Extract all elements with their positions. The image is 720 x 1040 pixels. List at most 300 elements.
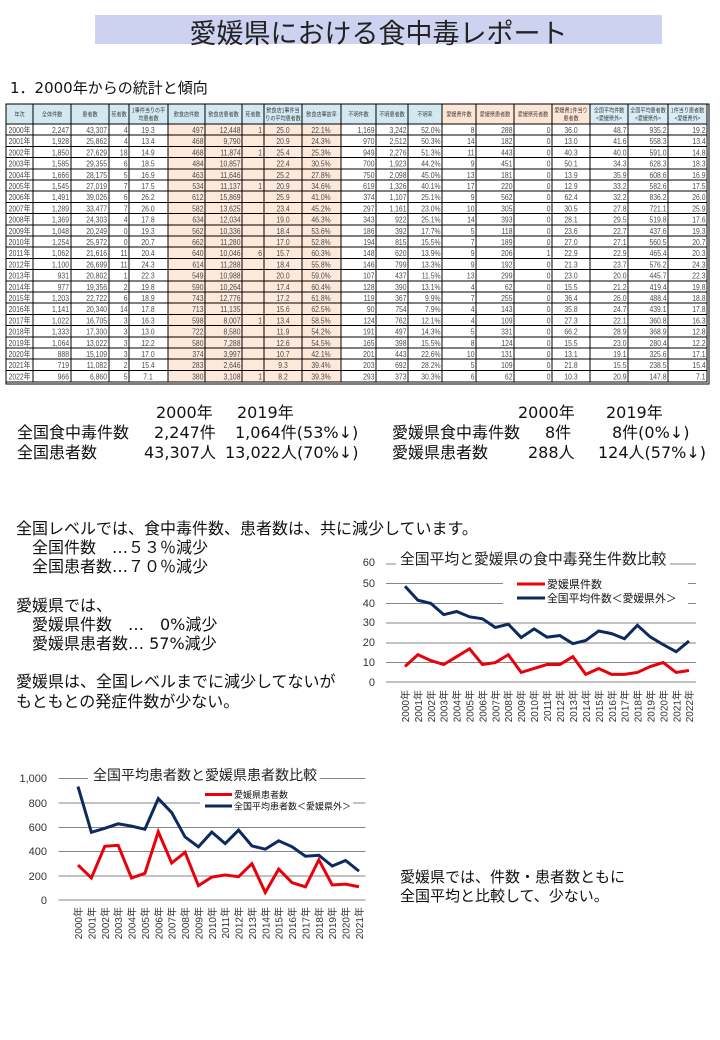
- table data rows: 20.0: [276, 271, 290, 281]
- table header row: [14, 105, 704, 123]
- y axis labels chart 2: 1,000: [19, 773, 47, 785]
- table data rows: 590: [192, 282, 204, 292]
- legend chart 1: [503, 576, 688, 607]
- table data rows: 17.1: [692, 349, 705, 359]
- table data rows: 15.5: [613, 360, 627, 370]
- table data rows: 14: [120, 304, 128, 314]
- x axis labels chart 2: 2015年: [273, 907, 286, 939]
- table data rows: 0: [547, 136, 551, 146]
- table data rows: 46.3%: [311, 215, 331, 225]
- table header row: 不明率: [417, 109, 433, 119]
- table data rows: 27,629: [86, 148, 107, 158]
- table data rows: 11,280: [220, 237, 240, 247]
- table data rows: 17.8: [141, 304, 155, 314]
- table data rows: 6: [124, 159, 128, 169]
- table data rows: 255: [501, 293, 513, 303]
- table data rows: 1,326: [389, 181, 407, 191]
- table data rows: 299: [501, 271, 513, 281]
- table data rows: 374: [363, 192, 375, 202]
- table data rows: 6: [471, 372, 475, 382]
- table header row: 飲食店件数: [174, 109, 200, 119]
- table data rows: 10: [467, 349, 474, 359]
- x axis labels chart 1: 2004年: [451, 690, 464, 722]
- table data rows: 25.9: [276, 192, 290, 202]
- analysis text block: 全国件数 …５３％減少: [32, 538, 208, 557]
- table data rows: 30.5: [564, 204, 578, 214]
- table data rows: 10,264: [220, 282, 241, 292]
- table data rows: 3: [124, 316, 128, 326]
- table data rows: 1,850: [52, 148, 69, 158]
- table data rows: 392: [395, 226, 406, 236]
- table data rows: 3: [124, 349, 128, 359]
- table data rows: 36.0: [564, 125, 578, 135]
- table data rows: 3: [124, 338, 128, 348]
- table data rows: 26.0: [141, 204, 155, 214]
- table data rows: 18.9: [141, 293, 155, 303]
- y axis labels chart 2: 0: [41, 895, 47, 907]
- conclusion text: 全国平均と比較して、少ない。: [400, 887, 609, 905]
- table data rows: 24.3%: [311, 136, 331, 146]
- table data rows: 238.5: [649, 360, 666, 370]
- table data rows: [9, 124, 706, 382]
- table header row: 死者数: [111, 109, 127, 119]
- national statistics summary: 1,064件(53%↓): [235, 423, 358, 442]
- table data rows: 18.8: [692, 293, 705, 303]
- table data rows: 23.4: [276, 204, 290, 214]
- table data rows: 390: [395, 282, 406, 292]
- table data rows: 62.5%: [311, 304, 331, 314]
- table data rows: 576.2: [649, 260, 666, 270]
- table data rows: 0: [547, 237, 551, 247]
- table data rows: 14.9: [141, 148, 155, 158]
- x axis labels chart 1: 2010年: [528, 690, 541, 722]
- table data rows: 591.0: [649, 148, 666, 158]
- x axis labels chart 1: 2007年: [489, 690, 502, 722]
- table data rows: 25,972: [86, 237, 107, 247]
- table data rows: 4: [471, 304, 475, 314]
- table data rows: 42.1%: [311, 349, 331, 359]
- table data rows: 662: [192, 237, 204, 247]
- table data rows: 1,666: [52, 170, 69, 180]
- table data rows: 19.3: [692, 226, 705, 236]
- table data rows: 147.8: [649, 372, 666, 382]
- table data rows: 25.9: [692, 204, 705, 214]
- table data rows: 620: [395, 248, 406, 258]
- Ehime statistics summary: 愛媛県食中毒件数: [392, 423, 520, 442]
- table data rows: 0: [547, 215, 551, 225]
- table data rows: 280.4: [650, 338, 667, 348]
- table data rows: 1,333: [52, 327, 69, 337]
- table data rows: 124: [501, 338, 513, 348]
- table data rows: 0: [547, 293, 551, 303]
- x axis labels chart 2: 2007年: [166, 907, 179, 939]
- national statistics summary: 2,247件: [154, 423, 216, 442]
- conclusion text: 愛媛県では、件数・患者数ともに: [400, 868, 625, 886]
- table data rows: 0: [547, 226, 551, 236]
- table data rows: 608.6: [649, 170, 666, 180]
- table data rows: 17.8: [141, 215, 155, 225]
- table data rows: 59.0%: [311, 271, 331, 281]
- table data rows: 2008年: [9, 214, 31, 225]
- gridlines chart 2: [59, 779, 366, 900]
- x axis labels chart 1: 2018年: [632, 690, 645, 722]
- table data rows: 17,300: [86, 327, 107, 337]
- table data rows: 62: [505, 282, 512, 292]
- table data rows: 10.3: [564, 372, 578, 382]
- table data rows: 51.3%: [421, 148, 441, 158]
- y axis labels chart 1: 50: [363, 578, 375, 590]
- table data rows: 935.2: [649, 125, 666, 135]
- table data rows: 7.1: [696, 372, 705, 382]
- table data rows: 1,064: [52, 338, 70, 348]
- table data rows: 17.4: [276, 282, 290, 292]
- x axis labels chart 1: 2005年: [464, 690, 476, 722]
- table data rows: 836.2: [649, 192, 666, 202]
- table data rows: 14: [467, 136, 475, 146]
- table data rows: 5: [124, 372, 128, 382]
- table data rows: 10.7: [276, 349, 290, 359]
- table data rows: 1,585: [52, 159, 69, 169]
- table data rows: 17.2: [276, 293, 290, 303]
- table data rows: 380: [192, 372, 204, 382]
- table data rows: 6: [124, 192, 128, 202]
- x axis labels chart 1: 2021年: [670, 690, 683, 722]
- table data rows: 0: [547, 192, 551, 202]
- table data rows: 0: [547, 316, 551, 326]
- legend chart 2: 全国平均患者数＜愛媛県外＞: [234, 800, 351, 812]
- table data rows: 165: [363, 338, 375, 348]
- table data rows: 6,860: [90, 372, 107, 382]
- table data rows: 17.6: [692, 215, 705, 225]
- table data rows: 10: [467, 204, 474, 214]
- table data rows: 11.9: [277, 327, 289, 337]
- table data rows: 34.3: [613, 159, 627, 169]
- table header row: 不明患者数: [379, 109, 405, 119]
- table header row: 飲食店1事件当: [266, 105, 300, 115]
- table data rows: 949: [363, 148, 375, 158]
- table data rows: 393: [501, 215, 513, 225]
- table data rows: 762: [395, 316, 406, 326]
- y axis labels chart 1: [363, 557, 375, 689]
- legend chart 1: 全国平均件数＜愛媛県外＞: [547, 590, 677, 606]
- table data rows: 20.0: [613, 271, 627, 281]
- x axis labels chart 2: 2020年: [340, 907, 353, 939]
- table data rows: 888: [58, 349, 69, 359]
- table data rows: 17.5: [141, 181, 155, 191]
- table data rows: 640: [192, 248, 204, 258]
- table data rows: 13,022: [86, 338, 107, 348]
- table data rows: 8: [471, 338, 475, 348]
- table data rows: 970: [363, 136, 375, 146]
- table data rows: 2006年: [9, 191, 31, 202]
- table data rows: 614: [192, 260, 204, 270]
- x axis labels chart 2: 2017年: [300, 907, 312, 939]
- legend chart 2: [200, 786, 353, 812]
- table data rows: 11: [120, 260, 128, 270]
- table data rows: 33.2: [613, 181, 627, 191]
- table data rows: 12.2: [141, 338, 155, 348]
- table data rows: 1,100: [52, 260, 69, 270]
- table header row: 飲食店事故率: [306, 109, 337, 119]
- table data rows: 20,249: [86, 226, 107, 236]
- x axis labels chart 1: 2009年: [515, 690, 528, 722]
- table data rows: 0: [547, 360, 551, 370]
- table data rows: 2001年: [9, 135, 31, 146]
- table data rows: 5: [471, 360, 475, 370]
- y axis labels chart 1: 0: [369, 677, 375, 689]
- table data rows: 23.0: [613, 338, 627, 348]
- table data rows: 9: [471, 192, 475, 202]
- table data rows: 582: [192, 204, 204, 214]
- table data rows: 7.1: [143, 372, 153, 382]
- analysis text block: 全国患者数…７０％減少: [32, 557, 208, 576]
- table data rows: 34.6%: [311, 181, 331, 191]
- table data rows: 2003年: [9, 158, 31, 169]
- table data rows: 194: [363, 237, 375, 247]
- x axis labels chart 2: 2003年: [112, 907, 125, 939]
- table data rows: 439.1: [649, 304, 666, 314]
- table data rows: 43,307: [86, 125, 107, 135]
- table data rows: 62.4: [564, 192, 578, 202]
- table data rows: 28,175: [86, 170, 107, 180]
- table data rows: 1: [547, 248, 551, 258]
- table data rows: 549: [192, 271, 204, 281]
- table data rows: 25.1%: [421, 215, 441, 225]
- table data rows: 2: [124, 360, 128, 370]
- table data rows: 13: [467, 271, 474, 281]
- table header row: 飲食店患者数: [208, 109, 239, 119]
- table data rows: 612: [192, 192, 204, 202]
- table data rows: 28.1: [564, 215, 578, 225]
- table data rows: 0: [547, 181, 551, 191]
- table data rows: 12.8: [692, 327, 705, 337]
- table data rows: 0: [547, 125, 551, 135]
- table data rows: 26.0: [613, 293, 627, 303]
- Ehime statistics summary: 2000年: [518, 403, 575, 422]
- table data rows: 451: [501, 159, 513, 169]
- table data rows: 343: [363, 215, 375, 225]
- table data rows: 15.7: [276, 248, 290, 258]
- series: national average patients: [78, 787, 359, 871]
- table data rows: 1: [124, 271, 128, 281]
- legend chart 2: 愛媛県患者数: [234, 788, 288, 801]
- table data rows: 2,247: [52, 125, 69, 135]
- table data rows: 18: [120, 148, 128, 158]
- table data rows: 21,616: [86, 248, 107, 258]
- table data rows: 20.9: [613, 372, 627, 382]
- table data rows: 2007年: [9, 203, 31, 214]
- table data rows: 12,776: [220, 293, 240, 303]
- title: [95, 15, 662, 44]
- table data rows: 21.2: [613, 282, 627, 292]
- national statistics summary: 全国食中毒件数: [17, 423, 129, 442]
- x axis labels chart 1: 2015年: [593, 690, 606, 722]
- chart title 1: 全国平均と愛媛県の食中毒発生件数比較: [400, 548, 667, 569]
- table data rows: 13.4: [276, 316, 290, 326]
- national statistics summary: [17, 403, 358, 462]
- table data rows: 488.4: [650, 293, 667, 303]
- Ehime statistics summary: 8件(0%↓): [612, 423, 689, 442]
- table data rows: 45.2%: [311, 204, 331, 214]
- table data rows: 44.2%: [421, 159, 441, 169]
- table data rows: 305: [501, 204, 513, 214]
- table data rows: 0: [547, 159, 551, 169]
- table data rows: 2017年: [9, 315, 31, 326]
- table data rows: 1: [258, 148, 262, 158]
- x axis labels chart 2: 2021年: [353, 907, 366, 939]
- x axis labels chart 1: 2008年: [502, 690, 515, 722]
- table data rows: 1: [258, 316, 262, 326]
- table data rows: 1,545: [52, 181, 69, 191]
- table data rows: 11.5%: [422, 271, 441, 281]
- table data rows: 0: [124, 237, 128, 247]
- table data rows: 1,107: [389, 192, 407, 202]
- table data rows: 20.9: [276, 136, 290, 146]
- table data rows: 0: [547, 260, 551, 270]
- table data rows: 66.2: [564, 327, 578, 337]
- x axis labels chart 1: [399, 690, 696, 722]
- table data rows: 0: [547, 349, 551, 359]
- table data rows: 18.5: [141, 159, 155, 169]
- table data rows: 25.2: [276, 170, 290, 180]
- table data rows: 12.1%: [421, 316, 441, 326]
- table data rows: 9: [471, 159, 475, 169]
- table data rows: 186: [363, 226, 375, 236]
- table data rows: 19.3: [141, 125, 155, 135]
- table data rows: 325.6: [649, 349, 666, 359]
- table data rows: 61.8%: [311, 293, 331, 303]
- table data rows: 1,048: [52, 226, 69, 236]
- x axis labels chart 2: 2006年: [152, 907, 165, 939]
- x axis labels chart 2: 2013年: [246, 907, 259, 939]
- table header row: 均患者数: [138, 113, 159, 123]
- x axis labels chart 1: 2000年: [399, 690, 412, 722]
- table data rows: 58.5%: [311, 316, 331, 326]
- national statistics summary: 13,022人(70%↓): [225, 443, 358, 462]
- table data rows: 192: [501, 260, 513, 270]
- table data rows: 0: [547, 271, 551, 281]
- table data rows: 182: [501, 136, 513, 146]
- Ehime statistics summary: [392, 403, 706, 462]
- table data rows: 41.0%: [311, 192, 331, 202]
- table data rows: 124: [363, 316, 375, 326]
- x axis labels chart 1: 2001年: [412, 690, 425, 722]
- x axis labels chart 2: 2010年: [206, 907, 219, 939]
- table data rows: 721.1: [649, 204, 666, 214]
- table header row: 不明件数: [348, 109, 369, 119]
- table data rows: 20.3: [692, 248, 705, 258]
- table data rows: 22.3: [141, 271, 155, 281]
- table data rows: 7: [124, 181, 128, 191]
- table data rows: 443: [501, 148, 513, 158]
- table data rows: 2: [124, 282, 128, 292]
- table data rows: 1: [258, 125, 262, 135]
- table header row: <愛媛県外>: [596, 113, 622, 123]
- table data rows: 283: [192, 360, 204, 370]
- x axis labels chart 2: 2008年: [179, 907, 192, 939]
- Ehime statistics summary: 288人: [528, 443, 575, 462]
- Ehime statistics summary: 8件: [545, 423, 571, 442]
- table data rows: 28.9: [613, 327, 627, 337]
- table data rows: 25,862: [86, 136, 107, 146]
- table data rows: 374: [192, 349, 204, 359]
- table data rows: 12.6: [276, 338, 290, 348]
- table data rows: 750: [363, 170, 375, 180]
- table data rows: 1,022: [52, 316, 69, 326]
- table data rows: 20,802: [86, 271, 107, 281]
- table data rows: 1,161: [389, 204, 407, 214]
- table data rows: 24.7: [613, 304, 627, 314]
- table data rows: 13.0: [141, 327, 155, 337]
- table header row: 1事件当りの平: [132, 105, 165, 115]
- table data rows: 713: [192, 304, 204, 314]
- table data rows: 41.6: [613, 136, 627, 146]
- table data rows: 288: [501, 125, 513, 135]
- table header row: 死者数: [245, 109, 261, 119]
- table data rows: 50.1: [564, 159, 578, 169]
- table data rows: 619: [363, 181, 375, 191]
- x axis labels chart 2: 2001年: [85, 907, 98, 939]
- table data rows: 109: [501, 316, 513, 326]
- table data rows: 1,369: [52, 215, 69, 225]
- x axis labels chart 1: 2017年: [619, 690, 632, 722]
- table data rows: 107: [363, 271, 375, 281]
- table data rows: 799: [395, 260, 406, 270]
- table data rows: 9.3: [278, 360, 288, 370]
- table data rows: 25.0: [276, 125, 290, 135]
- table data rows: 18.3: [692, 159, 705, 169]
- table data rows: 2020年: [9, 348, 31, 359]
- table header row: 愛媛県死者数: [518, 109, 549, 119]
- table data rows: 36.4: [564, 293, 578, 303]
- table data rows: 14.8: [692, 148, 705, 158]
- table data rows: 17.5: [692, 181, 705, 191]
- table data rows: 2019年: [9, 337, 31, 348]
- table data rows: 45.0%: [421, 170, 441, 180]
- table data rows: 19.8: [692, 282, 705, 292]
- table data rows: 0: [547, 282, 551, 292]
- table data rows: 40.1%: [421, 181, 441, 191]
- y axis labels chart 1: 30: [363, 617, 375, 629]
- table data rows: 465.4: [650, 248, 667, 258]
- table data rows: 27.8%: [311, 170, 331, 180]
- table data rows: 4: [124, 125, 128, 135]
- x axis labels chart 2: 2019年: [326, 907, 339, 939]
- table data rows: 18.4: [276, 260, 290, 270]
- table data rows: 3,108: [223, 372, 240, 382]
- x axis labels chart 2: 2011年: [219, 907, 232, 939]
- x axis labels chart 2: 2012年: [233, 907, 246, 939]
- table data rows: 628.3: [649, 159, 666, 169]
- table data rows: 109: [501, 360, 513, 370]
- national statistics summary: 2000年: [156, 403, 213, 422]
- table data rows: 7: [471, 293, 475, 303]
- x axis labels chart 2: 2018年: [313, 907, 326, 939]
- y axis labels chart 2: 200: [29, 871, 47, 883]
- table data rows: 15.5: [564, 282, 578, 292]
- table data rows: 17.8: [692, 304, 705, 314]
- series: national average incidents: [405, 586, 689, 652]
- table data rows: 13.9%: [421, 248, 441, 258]
- table data rows: 25.1%: [421, 192, 441, 202]
- table data rows: 26,699: [86, 260, 107, 270]
- series: Ehime incidents: [405, 649, 689, 674]
- table data rows: 201: [363, 349, 375, 359]
- table data rows: 16.3: [141, 316, 155, 326]
- table data rows: 0: [124, 226, 128, 236]
- table data rows: 2011年: [9, 247, 31, 258]
- table data rows: 24.3: [141, 260, 155, 270]
